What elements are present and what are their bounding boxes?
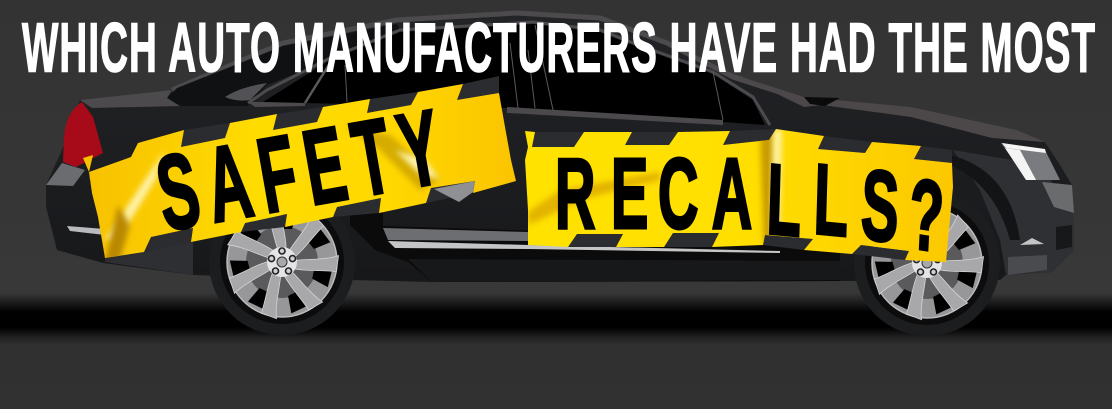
word Recalls: RECALLS? bbox=[555, 139, 946, 274]
tail light bbox=[63, 102, 103, 167]
fog vent bbox=[1056, 225, 1072, 250]
tape folds left bbox=[105, 125, 440, 262]
tape dark stripes right bbox=[532, 129, 952, 260]
chrome door strip bbox=[383, 228, 528, 241]
rear pillar shadow bbox=[167, 24, 400, 106]
rear wheel bbox=[209, 189, 355, 335]
rear window sill bbox=[248, 102, 305, 107]
rocker strip bbox=[408, 259, 840, 282]
tape dark stripes left bbox=[89, 76, 499, 262]
tape yellow right bbox=[525, 129, 953, 262]
mirror bbox=[804, 97, 840, 106]
roof edge highlight bbox=[172, 13, 804, 100]
trunk highlight bbox=[80, 90, 180, 108]
rear window surround ellipse bbox=[225, 83, 267, 101]
rear lower bumper bbox=[105, 240, 193, 275]
word Safety: SAFETY bbox=[149, 86, 459, 254]
title: WHICH AUTO MANUFACTURERS HAVE HAD THE MOST bbox=[22, 8, 1095, 86]
inner roof strip bbox=[248, 22, 770, 125]
car body bbox=[46, 13, 1074, 282]
tape folds right bbox=[528, 130, 782, 245]
front wheel arch bbox=[950, 155, 1020, 240]
windshield pillar and hood highlight bbox=[710, 65, 1045, 142]
headlight bbox=[1001, 143, 1060, 180]
car bbox=[46, 13, 1074, 336]
rear bumper corner bbox=[46, 163, 85, 186]
front bumper grey bbox=[1042, 182, 1074, 213]
headlight streak bbox=[1002, 143, 1046, 180]
left tape: Safety bbox=[83, 76, 516, 262]
tape yellow left bbox=[83, 84, 516, 258]
bumper chip bbox=[1020, 238, 1044, 245]
white door strip bbox=[388, 241, 780, 253]
right tape: Recalls bbox=[525, 129, 953, 274]
floor shadow band bbox=[0, 293, 1112, 345]
front wheel bbox=[854, 190, 1000, 336]
tape peel bbox=[434, 181, 475, 202]
door window sill bbox=[507, 107, 723, 125]
car lower shadow sill bbox=[350, 200, 840, 282]
front fender bbox=[953, 150, 1074, 275]
window pillars bbox=[305, 25, 723, 120]
front lower lip bbox=[1008, 255, 1047, 275]
rear chrome strip bbox=[67, 226, 105, 235]
side windows bbox=[263, 24, 765, 125]
